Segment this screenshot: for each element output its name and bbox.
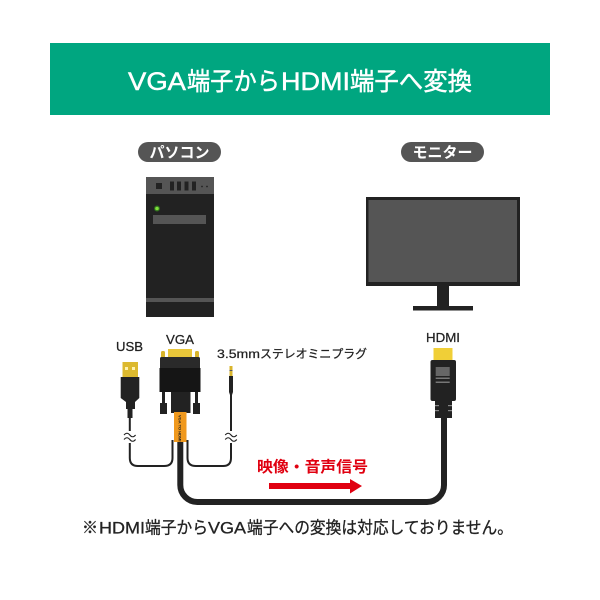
icon: HDMI plug — [430, 348, 456, 418]
cable: USB branch — [130, 405, 172, 466]
label: USB: USB — [116, 340, 143, 354]
footnote: HDMI — [99, 518, 145, 538]
title: HDMI — [281, 68, 350, 96]
footnote: 端子への変換は対応しておりません。 — [247, 518, 513, 538]
cable: audio branch — [188, 390, 231, 466]
break mark: audio cable — [224, 431, 238, 443]
label pill: PC: パソコン — [149, 144, 210, 162]
label: HDMI: HDMI — [426, 331, 460, 345]
icon: USB plug — [121, 362, 139, 418]
icon: monitor — [366, 197, 520, 310]
label: 3.5mm stereo mini plug: ステレオミニプラグ — [260, 347, 367, 361]
footnote: VGA — [208, 518, 247, 538]
icon: 3.5mm audio plug — [229, 366, 233, 395]
label: video and audio signal: 映像・音声信号 — [257, 458, 368, 476]
label pill: monitor: モニター — [412, 144, 473, 162]
label pill: PC — [138, 142, 221, 162]
title: 端子へ変換 — [350, 68, 472, 96]
footnote — [82, 518, 513, 538]
icon: desktop PC tower — [146, 177, 214, 317]
cable label: orange band — [174, 412, 186, 442]
cable: main VGA to HDMI — [180, 415, 444, 502]
title banner — [50, 43, 550, 115]
icon: VGA plug — [160, 349, 200, 414]
title: 端子から — [187, 68, 280, 96]
title: VGA — [128, 68, 186, 96]
footnote: ※ — [82, 518, 98, 538]
break mark: USB cable — [123, 431, 137, 443]
arrow: signal direction — [269, 479, 362, 494]
cable label: orange band: VGA TO HDMI — [178, 415, 182, 441]
footnote: 端子から — [145, 518, 208, 538]
label: VGA: VGA — [166, 333, 195, 347]
title — [128, 68, 472, 96]
label pill: monitor — [401, 142, 484, 162]
label: 3.5mm stereo mini plug: 3.5mm — [217, 347, 260, 361]
